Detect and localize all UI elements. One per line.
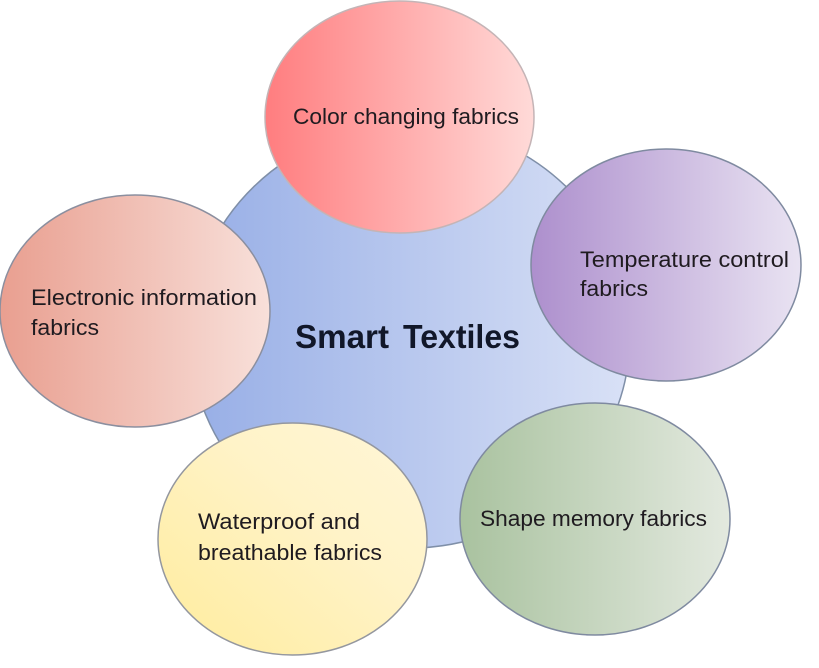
bubble: shape memory fabrics [460, 403, 730, 635]
bubble: waterproof and breathable fabrics: Waterproof and [198, 509, 360, 534]
bubble: temperature control fabrics: fabrics [580, 276, 648, 301]
bubble: color changing fabrics: Color changing fabrics [293, 104, 519, 129]
bubble: waterproof and breathable fabrics [158, 423, 427, 655]
bubble: electronic information fabrics: Electronic information [31, 285, 257, 310]
central circle [190, 124, 630, 548]
title [295, 318, 520, 355]
title: Textiles [403, 318, 520, 355]
bubble: temperature control fabrics [531, 149, 801, 381]
bubble: waterproof and breathable fabrics: breathable fabrics [198, 540, 382, 565]
bubble: color changing fabrics [265, 1, 534, 233]
bubble: shape memory fabrics: Shape memory fabrics [480, 506, 707, 531]
title: Smart [295, 318, 389, 355]
bubble: electronic information fabrics [0, 195, 270, 427]
bubble: electronic information fabrics: fabrics [31, 315, 99, 340]
bubble: temperature control fabrics: Temperature control [580, 247, 789, 272]
